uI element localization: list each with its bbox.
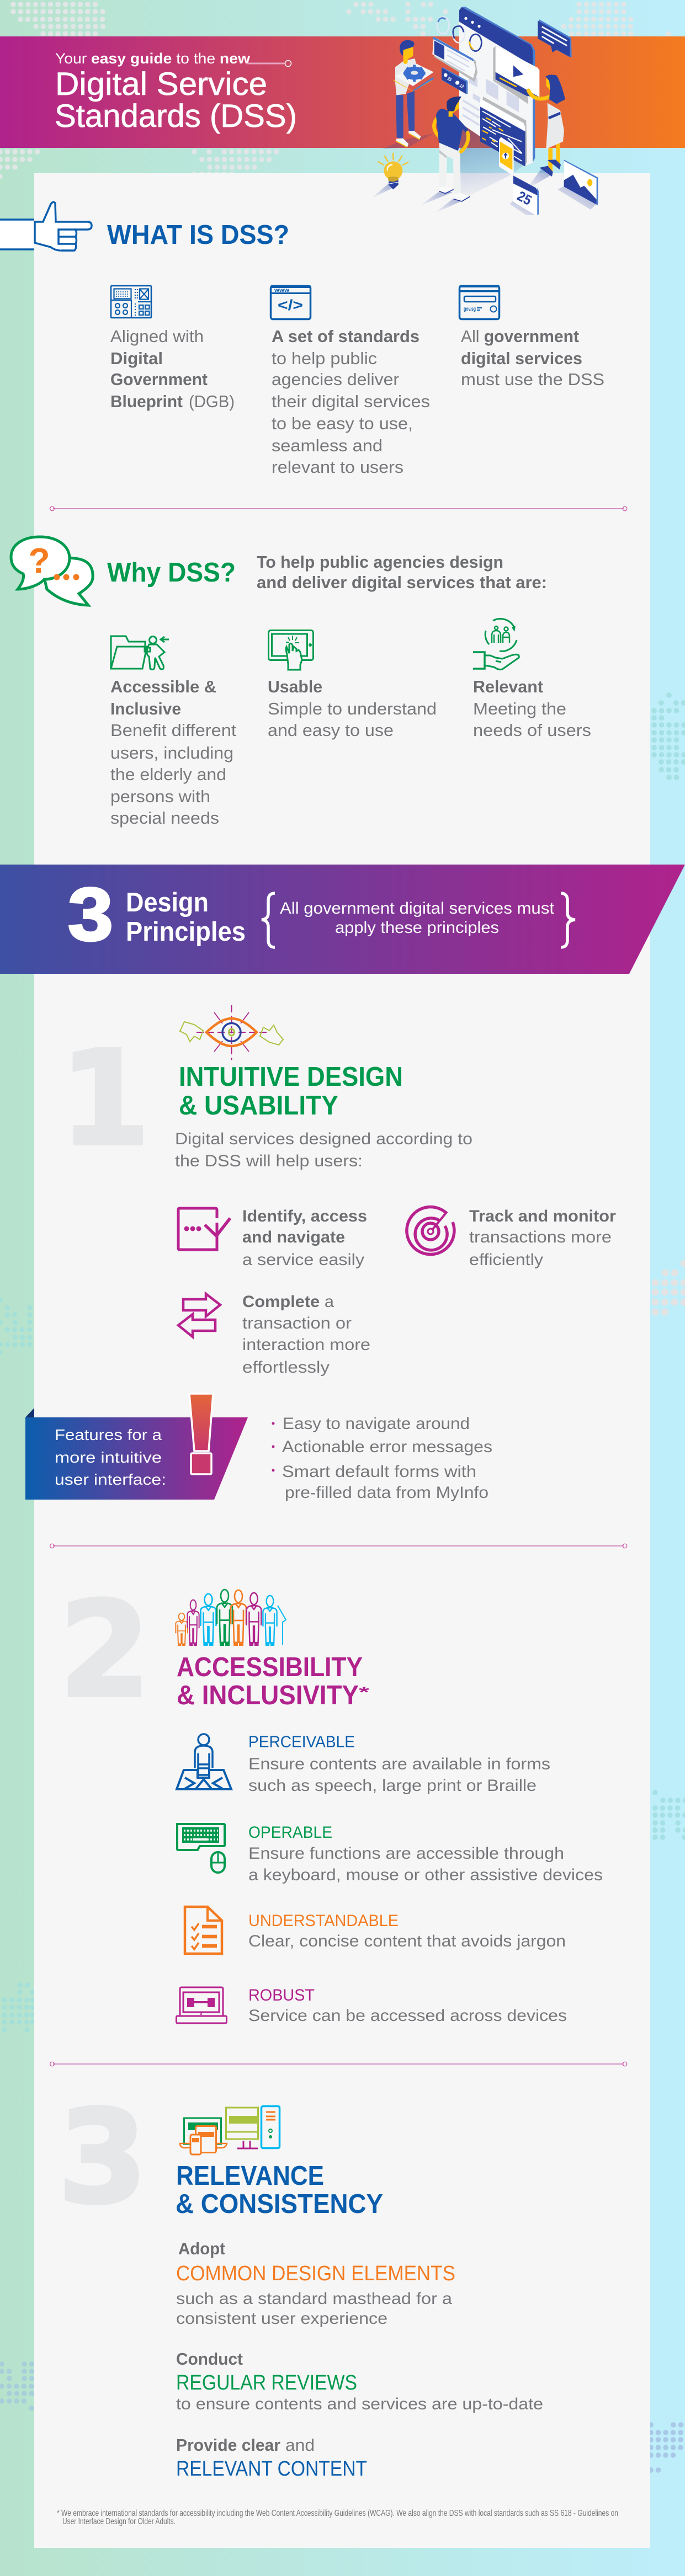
text: Benefit different: [110, 721, 236, 740]
left content card: [432, 37, 477, 82]
man holding gear: [393, 40, 434, 147]
item: common design elements: Adopt: [178, 2239, 225, 2258]
text: OPERABLE: [248, 1823, 332, 1842]
subtitle: All government digital services must: [280, 899, 555, 918]
big number 3: 3: [68, 872, 113, 956]
lead text: [257, 552, 547, 592]
banner: 3 design principles: [0, 865, 685, 974]
icon: person at crossroads: [177, 1734, 231, 1789]
text: effortlessly: [242, 1358, 330, 1377]
callout text: Features for a: [55, 1426, 162, 1443]
text: agencies deliver: [272, 370, 399, 389]
icon: blueprint: [111, 286, 151, 318]
heading: RELEVANCE: [176, 2161, 324, 2191]
code card: [480, 97, 527, 167]
heading: [176, 2161, 383, 2219]
icon: group of people: [176, 1590, 286, 1646]
dotted world map pattern: top: [0, 4, 668, 177]
item: regular reviews: Conduct: [176, 2349, 243, 2369]
left brace: [262, 893, 275, 947]
icon: eye with hands: [180, 1005, 283, 1060]
item: relevant content: Provide clear: [176, 2435, 280, 2455]
big number 2: 2: [59, 1574, 151, 1727]
principle 3: relevance and consistency: [58, 2083, 543, 2481]
text: a service easily: [242, 1251, 364, 1269]
lead text: and deliver digital services that are:: [257, 573, 547, 592]
woman: [528, 74, 565, 177]
heading: & CONSISTENCY: [176, 2189, 383, 2219]
heading: ACCESSIBILITY: [177, 1652, 363, 1682]
likes card: 12: [459, 83, 465, 89]
heading: design principles: Principles: [126, 917, 246, 947]
main screen: [459, 7, 535, 167]
text: special needs: [110, 808, 219, 828]
item: relevant content: and: [285, 2435, 315, 2455]
text: such as speech, large print or Braille: [248, 1777, 537, 1795]
text: [272, 327, 430, 477]
callout shape: [25, 1408, 248, 1500]
big number 1: 1: [60, 1023, 150, 1175]
subtitle: [280, 899, 555, 937]
hero illustration: team building a digital service: [371, 7, 598, 215]
item: relevant content: [176, 2435, 367, 2481]
text: UNDERSTANDABLE: [248, 1912, 399, 1930]
text: and easy to use: [268, 721, 394, 740]
heading: design principles: Design: [126, 888, 209, 918]
icon: pointing hand: [0, 202, 92, 250]
dotted world map pattern: sides: [0, 695, 685, 2470]
text: Accessible &: [110, 677, 216, 696]
video card: [493, 46, 539, 104]
calendar: [513, 175, 539, 215]
text: [248, 1733, 550, 1795]
connector line: [247, 61, 291, 66]
text: the elderly and: [110, 765, 226, 784]
item: common design elements: consistent user experience: [176, 2310, 387, 2328]
text: [248, 1823, 603, 1884]
bullet list: pre-filled data from MyInfo: [285, 1484, 488, 1502]
heading: design principles: [126, 888, 246, 947]
text: needs of users: [473, 721, 591, 740]
right brace: [561, 893, 575, 947]
text: interaction more: [242, 1336, 370, 1354]
footnote: [57, 2509, 618, 2526]
title line 1: Digital Service: [55, 66, 267, 102]
text: Simple to understand: [268, 699, 437, 718]
intro line: Your easy guide to the new: [55, 50, 251, 67]
item: understandable: [185, 1907, 566, 1954]
text: [473, 677, 591, 740]
icon: exchange arrows: [178, 1294, 220, 1337]
item: relevant content: RELEVANT CONTENT: [176, 2457, 367, 2481]
light bulb: [379, 153, 408, 189]
item: identify, access, navigate: [178, 1207, 367, 1269]
text: [461, 327, 604, 389]
phone: [499, 137, 514, 174]
title block: [55, 50, 297, 134]
text: [242, 1207, 367, 1269]
text: transaction or: [242, 1314, 352, 1332]
text: PERCEIVABLE: [248, 1733, 355, 1751]
heading: [179, 1062, 403, 1121]
subtitle: apply these principles: [335, 919, 499, 937]
section: why DSS: [11, 537, 591, 828]
section: what is DSS: [0, 202, 604, 477]
bullet list: Actionable error messages: [282, 1438, 492, 1456]
item: complete a transaction: [178, 1293, 370, 1377]
big number 3: 3: [58, 2083, 147, 2232]
text: [469, 1207, 617, 1269]
item: track and monitor: [407, 1207, 617, 1269]
icon: devices: [180, 2106, 279, 2154]
icon: tablet with dumbbell: [177, 1987, 226, 2023]
calendar: 25: [514, 188, 534, 209]
text: Clear, concise content that avoids jargon: [248, 1932, 566, 1950]
title line 2: Standards (DSS): [55, 98, 297, 134]
icon: checklist: [185, 1907, 222, 1954]
item: common design elements: such as a standard masthead for a: [176, 2290, 453, 2308]
icon: speech bubbles: ?: [28, 541, 50, 580]
heading: & USABILITY: [179, 1091, 338, 1121]
icon: gov.sg window: [459, 285, 500, 319]
heading: & INCLUSIVITY: [177, 1681, 359, 1710]
icon: exclamation mark: [189, 1394, 213, 1474]
item: common design elements: [176, 2239, 455, 2328]
text: [248, 1912, 566, 1950]
bullet list: Smart default forms with: [282, 1463, 476, 1481]
callout text: user interface:: [55, 1471, 166, 1488]
band shape: [0, 865, 685, 974]
text: digital services: [461, 349, 582, 368]
text: All government: [461, 327, 579, 346]
item: all government digital services: [459, 285, 604, 389]
lead text: To help public agencies design: [257, 552, 503, 572]
text: [110, 327, 235, 411]
text: Complete a: [242, 1293, 334, 1311]
icon: code window: </>: [278, 297, 303, 313]
heading: [177, 1652, 370, 1710]
item: a set of standards: [270, 285, 430, 477]
text: seamless and: [272, 436, 383, 455]
text: relevant to users: [272, 457, 403, 477]
chat bubble: [538, 19, 572, 57]
item: operable: [177, 1823, 603, 1884]
icon: hand holding family: [473, 619, 519, 670]
callout text: more intuitive: [55, 1449, 162, 1466]
text: and navigate: [242, 1228, 345, 1246]
text: persons with: [110, 787, 210, 806]
icon: folder and person: [111, 636, 169, 669]
item: regular reviews: [176, 2349, 543, 2413]
item: perceivable: [177, 1733, 550, 1795]
bullet list: [272, 1415, 492, 1502]
text: transactions more: [469, 1228, 612, 1246]
item: common design elements: COMMON DESIGN ELEMENTS: [176, 2262, 455, 2285]
text: [268, 677, 437, 740]
item: aligned with DGB: [110, 286, 235, 411]
man in blue shirt: [434, 97, 470, 201]
item: accessible and inclusive: [110, 636, 236, 828]
dotted pattern: grey right cluster: [655, 1263, 684, 1312]
text: Track and monitor: [469, 1207, 617, 1225]
text: A set of standards: [272, 327, 420, 346]
text: to be easy to use,: [272, 414, 413, 433]
floor shadows: [371, 125, 596, 215]
icon: code window: [270, 285, 311, 319]
text: Identify, access: [242, 1207, 367, 1225]
icon: speech bubbles: [11, 537, 93, 605]
text: [248, 1986, 567, 2025]
text: must use the DSS: [461, 370, 604, 389]
text: users, including: [110, 743, 233, 762]
item: usable: [268, 630, 437, 740]
text: (DGB): [189, 392, 235, 411]
intro text: [175, 1130, 472, 1170]
progress rings: [437, 17, 481, 51]
text: [242, 1293, 370, 1377]
text: their digital services: [272, 392, 430, 411]
text: to help public: [272, 349, 377, 368]
callout text: [55, 1426, 166, 1488]
heading: INTUITIVE DESIGN: [179, 1062, 403, 1092]
principle 2: accessibility and inclusivity: [59, 1574, 603, 2025]
text: Service can be accessed across devices: [248, 2007, 567, 2025]
item: regular reviews: to ensure contents and services are up-to-date: [176, 2395, 543, 2413]
image card: [564, 159, 598, 205]
principle 1: intuitive design and usability: [25, 1005, 617, 1502]
banner: [0, 36, 685, 148]
icon: form with check: [178, 1208, 230, 1250]
footnote: User Interface Design for Older Adults.: [62, 2517, 176, 2526]
text: Digital: [110, 349, 163, 368]
icon: gov.sg window: gov.sg: [464, 306, 476, 312]
heading: *: [359, 1684, 370, 1700]
text: Ensure functions are accessible through: [248, 1844, 564, 1863]
likes card: 25: [447, 76, 453, 83]
item: regular reviews: REGULAR REVIEWS: [176, 2371, 357, 2394]
text: ROBUST: [248, 1986, 315, 2004]
bullet list: Easy to navigate around: [283, 1415, 470, 1433]
intro text: the DSS will help users:: [175, 1152, 363, 1170]
text: Usable: [268, 677, 322, 696]
text: Ensure contents are available in forms: [248, 1755, 550, 1773]
text: Meeting the: [473, 699, 566, 718]
icon: tablet touch: [268, 630, 314, 670]
text: Government: [110, 370, 208, 389]
text: Blueprint: [110, 392, 183, 411]
text: Inclusive: [110, 699, 181, 718]
intro text: Digital services designed according to: [175, 1130, 472, 1148]
text: Aligned with: [110, 327, 204, 346]
likes card: [442, 67, 468, 94]
icon: code window: www: [274, 287, 289, 294]
heading: what is DSS: WHAT IS DSS?: [107, 220, 289, 250]
icon: keyboard and mouse: [177, 1824, 225, 1873]
icon: target: [407, 1207, 454, 1255]
text: efficiently: [469, 1251, 543, 1269]
text: a keyboard, mouse or other assistive devices: [248, 1866, 603, 1884]
callout: features for a more intuitive interface: [25, 1394, 248, 1500]
heading: why DSS: Why DSS?: [107, 558, 236, 588]
item: robust: [177, 1986, 567, 2025]
text: Relevant: [473, 677, 543, 696]
text: [110, 677, 236, 828]
item: relevant: [473, 619, 591, 740]
